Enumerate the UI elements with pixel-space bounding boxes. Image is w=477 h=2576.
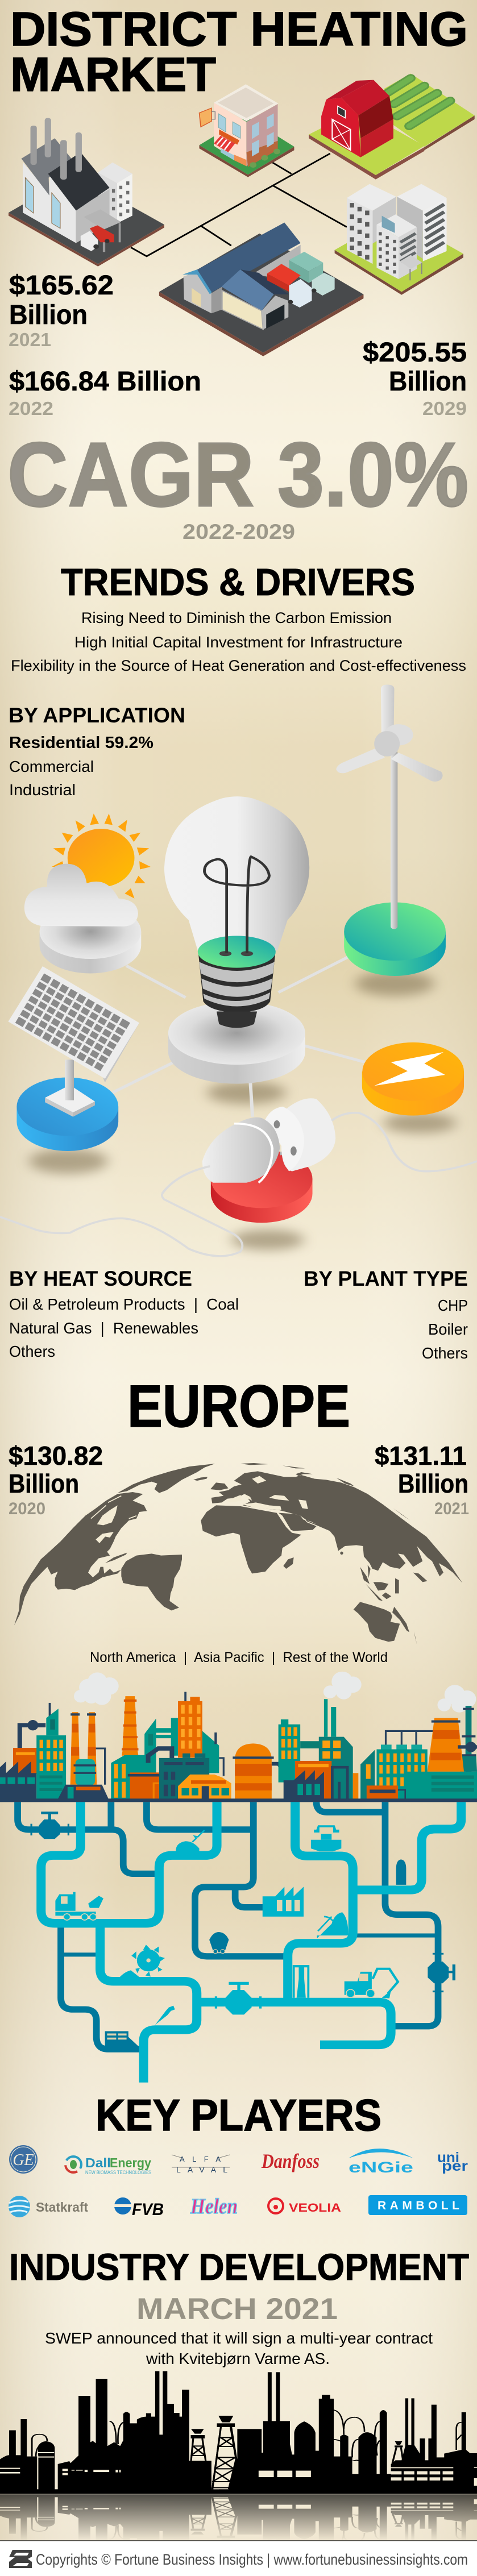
title: DISTRICT HEATING	[10, 2, 468, 56]
logo: Veolia: VEOLIA	[289, 2201, 341, 2214]
ground bar	[0, 1798, 477, 1802]
logo: Alfa Laval	[172, 2155, 230, 2174]
industry development: SWEP announced that it will sign a multi-year contract	[45, 2329, 433, 2347]
value 2021: $165.62	[9, 271, 114, 301]
by application: BY APPLICATION	[9, 704, 185, 727]
icon: wind turbine on disc	[336, 684, 446, 976]
icon: factory	[263, 1887, 304, 1917]
icon: red disc	[211, 1150, 313, 1223]
black skyline silhouette	[0, 2371, 477, 2494]
trends and drivers: Flexibility in the Source of Heat Generation and Cost-effectiveness	[11, 657, 466, 674]
logo: GE	[9, 2145, 38, 2174]
value 2021: Billion	[9, 300, 88, 330]
icon: barn and field	[309, 73, 475, 180]
logo: Ramboll	[368, 2195, 467, 2215]
logo: ENGIE	[349, 2149, 413, 2176]
by application: Commercial	[9, 758, 94, 775]
icon: sun and cloud on disc	[24, 813, 151, 973]
value 2021: 2021	[9, 329, 51, 350]
logo: Dall Energy: Dall	[85, 2155, 111, 2170]
logo: Danfoss: Danfoss	[261, 2150, 320, 2172]
world map	[14, 1463, 462, 1644]
icon: plug and socket	[202, 1098, 335, 1183]
logo: Statkraft	[9, 2196, 88, 2217]
icon: machine	[311, 1825, 341, 1851]
logo: ENGIE: eNGie	[349, 2159, 413, 2176]
trends and drivers	[11, 561, 466, 674]
other regions: North America | Asia Pacific | Rest of the World	[90, 1650, 388, 1665]
value 2029	[363, 338, 467, 419]
logo: FVB: FVB	[132, 2200, 164, 2219]
title	[10, 2, 468, 101]
Europe value 2021: $131.11	[375, 1441, 467, 1470]
by application	[9, 704, 185, 799]
by plant type: CHP	[438, 1297, 468, 1314]
logo: Veolia	[268, 2199, 341, 2214]
icon: light bulb on disc	[164, 796, 309, 1084]
skyline windows	[0, 2452, 477, 2489]
icon: lightning bolt on disc	[362, 1042, 464, 1116]
by application: Residential 59.2%	[9, 734, 154, 752]
by plant type: BY PLANT TYPE	[304, 1267, 468, 1290]
by heat source: Natural Gas | Renewables	[9, 1319, 198, 1337]
Europe value 2020: $130.82	[9, 1441, 103, 1470]
value 2021	[9, 271, 114, 350]
icon: store	[199, 84, 294, 177]
Europe heading: EUROPE	[127, 1373, 350, 1440]
value 2022: 2022	[9, 398, 53, 419]
by heat source: Others	[9, 1343, 55, 1360]
Europe value 2020: 2020	[9, 1499, 45, 1518]
industry development	[9, 2246, 469, 2367]
key players heading: KEY PLAYERS	[96, 2090, 381, 2140]
icon: coal heap and shovel	[176, 1841, 199, 1851]
Europe value 2020: Billion	[9, 1469, 79, 1498]
Europe value 2020	[9, 1441, 103, 1518]
industry development: MARCH 2021	[136, 2292, 338, 2326]
icon: mining wheel	[137, 1950, 160, 1971]
value 2029: 2029	[422, 398, 467, 419]
by heat source: BY HEAT SOURCE	[9, 1267, 192, 1290]
Europe value 2021: 2021	[434, 1499, 469, 1518]
logo: Alfa Laval: LAVAL	[176, 2165, 227, 2174]
logo: Helen: Helen	[190, 2195, 238, 2218]
icon: warehouse with trucks	[159, 222, 363, 356]
icon: solar panel on disc	[8, 966, 139, 1151]
industry development: with Kvitebjørn Varme AS.	[146, 2350, 330, 2367]
energy hub illustration	[8, 684, 477, 1250]
footer	[0, 2540, 477, 2576]
by plant type: Boiler	[428, 1320, 468, 1338]
value 2022	[9, 367, 201, 419]
connecting rods	[113, 957, 365, 1117]
by heat source	[9, 1267, 239, 1360]
map: Americas and Greenland	[14, 1464, 215, 1625]
isometric buildings network	[9, 73, 475, 356]
logo: uniper	[437, 2150, 468, 2174]
icon: concrete truck	[55, 1892, 103, 1916]
icon: excavator	[345, 1972, 372, 1995]
logo: Ramboll: RAMBOLL	[378, 2199, 459, 2212]
logos	[9, 2145, 468, 2219]
light pipes	[41, 1802, 461, 2083]
industrial skyline and pipes	[0, 1672, 477, 2083]
by application: Industrial	[9, 781, 76, 799]
value 2022: $166.84 Billion	[9, 367, 201, 397]
power cable	[162, 1113, 477, 1194]
map: Eurasia, Africa, Australia	[201, 1463, 462, 1644]
power cable lower section	[0, 1194, 242, 1256]
valves	[31, 1811, 455, 2014]
by plant type: Others	[422, 1344, 468, 1362]
icon: office towers	[335, 184, 463, 295]
icon: gantry	[293, 1965, 309, 1998]
trends and drivers: Rising Need to Diminish the Carbon Emission	[81, 609, 392, 626]
logo: Alfa Laval: ALFA	[180, 2155, 221, 2163]
logo: Dall Energy: Energy	[110, 2155, 151, 2170]
icon: dark pipeline icons	[105, 1859, 406, 2051]
icon: drill	[155, 2006, 175, 2025]
skyline reflection	[0, 2494, 477, 2538]
CAGR: 2022-2029	[182, 520, 295, 543]
Europe value 2021	[375, 1441, 469, 1518]
pipeline icons	[55, 1825, 398, 2025]
shadows	[29, 971, 457, 1250]
connecting lines	[131, 153, 347, 256]
icon: pick and rock	[317, 1912, 349, 1938]
dark pipes	[18, 1802, 438, 2049]
logo: uniper: uni	[437, 2150, 459, 2166]
icon: footer logo	[9, 2550, 32, 2568]
smoke clouds	[74, 1672, 476, 1713]
value 2029: $205.55	[363, 338, 467, 368]
logo: uniper: per	[442, 2158, 468, 2174]
logo: Dall Energy	[63, 2154, 151, 2175]
logo: FVB	[114, 2197, 164, 2219]
logo: Statkraft: Statkraft	[36, 2200, 88, 2214]
by plant type	[304, 1267, 468, 1362]
title: MARKET	[10, 48, 216, 101]
Europe value 2021: Billion	[398, 1469, 468, 1498]
value 2029: Billion	[389, 367, 467, 397]
derricks	[191, 2416, 403, 2448]
trends and drivers: TRENDS & DRIVERS	[61, 561, 415, 604]
icon: factory	[9, 118, 164, 267]
logo: GE: GE	[13, 2151, 34, 2169]
factory buildings	[0, 1692, 477, 1799]
trends and drivers: High Initial Capital Investment for Infrastructure	[74, 634, 403, 651]
by heat source: Oil & Petroleum Products | Coal	[9, 1295, 239, 1313]
logo: Dall Energy: NEW BIOMASS TECHNOLOGIES	[85, 2170, 151, 2175]
